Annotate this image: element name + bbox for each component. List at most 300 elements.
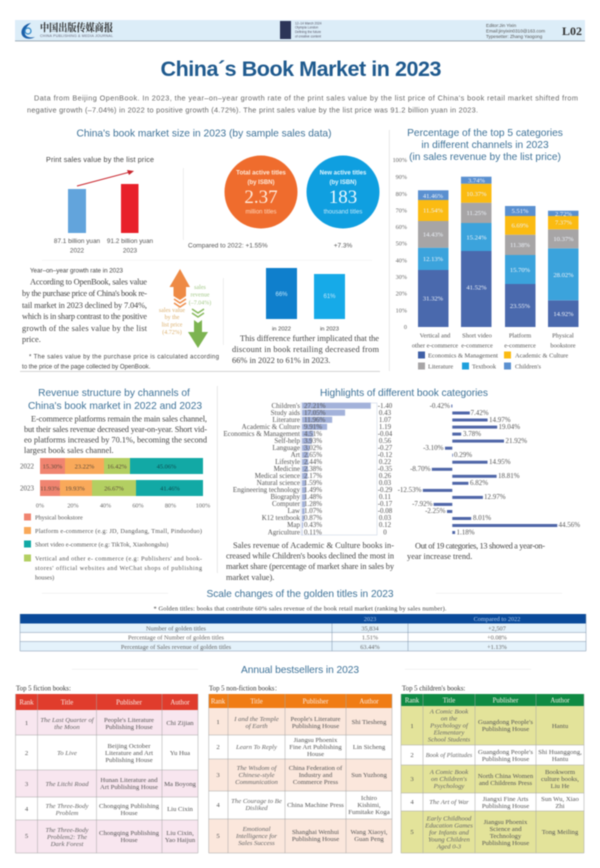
table: non-fiction: Ichiro xyxy=(361,795,378,802)
table: children's: Book of Platitudes xyxy=(426,752,473,759)
heading: China's book market in 2022 and 2023 xyxy=(28,401,202,412)
stacked bar: vertical and other: 12.13% xyxy=(423,256,444,263)
left paragraph: creased while Children's books declined the most in xyxy=(226,552,395,560)
table: non-fiction: Title xyxy=(250,698,263,706)
table: children's: 4 xyxy=(410,799,414,806)
table: fiction: Publishing House xyxy=(105,757,153,764)
market share bar chart: 0.56 xyxy=(379,437,392,445)
table: children's: Publishing House xyxy=(482,803,529,810)
table: fiction: Dark Forest xyxy=(50,841,83,848)
legend: Economics & Management xyxy=(428,352,498,360)
stacked bar: 2022: 16.42% xyxy=(107,464,128,470)
year-on-year diverging bar chart: 14.95% xyxy=(489,458,511,466)
paragraph: but their sales revenue decreased year-on-year. Short vid- xyxy=(24,425,207,434)
legend: Academic & Culture xyxy=(515,352,568,360)
table: non-fiction: 3 xyxy=(216,772,220,779)
table: fiction: The Last Quarter of xyxy=(40,717,95,724)
editor credits xyxy=(486,23,545,39)
bar chart: print sales value: 2022 xyxy=(70,248,85,254)
legend: Platform e-commerce (e.g: JD, Dangdang, Tmall, Pinduoduo) xyxy=(35,528,202,535)
stacked bar: 2023: 11.93% xyxy=(40,486,60,492)
icon: up and down arrows: (–7.04%) xyxy=(189,300,211,306)
paragraph: largest book sales channel. xyxy=(24,446,114,455)
market share bar chart: Biography xyxy=(270,493,300,501)
table: fiction: Yu Hua xyxy=(170,750,190,757)
table: fiction: Literature and Art xyxy=(105,750,153,757)
year-on-year diverging bar chart: 1.18% xyxy=(456,528,475,536)
axis labels: 60% xyxy=(132,502,144,510)
y axis labels xyxy=(393,157,407,331)
stacked bar: physical bookstore: 28.02% xyxy=(553,272,574,279)
stacked bar: 2022: 23.22% xyxy=(75,464,95,470)
table: non-fiction: The Courage to Be xyxy=(231,798,282,805)
table: children's: Guangdong People's xyxy=(478,719,533,726)
table: fiction: 4 xyxy=(25,806,29,813)
stacked bar: platform: 5.51% xyxy=(511,208,529,215)
bar chart: discount xyxy=(266,268,345,332)
table: non-fiction: Communication xyxy=(235,779,279,786)
market share bar chart: 3.93% xyxy=(304,437,322,445)
stacked bar: short video: 11.25% xyxy=(466,210,487,217)
table: fiction: People's Literature xyxy=(104,717,154,724)
stacked bar: physical bookstore: 10.37% xyxy=(553,236,574,243)
market share bar chart: Agriculture xyxy=(268,528,300,536)
year-on-year diverging bar chart: -7.92% xyxy=(412,500,433,508)
growth rate text: According to OpenBook, sales value xyxy=(30,278,147,286)
market share bar chart: Law xyxy=(288,507,301,515)
table: fiction: Beijing October xyxy=(108,743,151,750)
market share bar chart: -0.27 xyxy=(378,444,393,452)
comparison to 2022: Compared to 2022: +1.55% xyxy=(188,242,268,250)
table: non-fiction: China Federation of xyxy=(289,765,343,772)
discount text: discount in book retailing decreased from xyxy=(232,345,379,354)
paragraph xyxy=(24,414,208,455)
market share bar chart: 1.07 xyxy=(379,416,392,424)
table: non-fiction: Author xyxy=(359,698,379,706)
table: +0.08% xyxy=(487,634,508,642)
growth rate text: * The sales value by the purchase price is calculated according xyxy=(29,354,219,360)
table: fiction: Chongqing Publishing xyxy=(99,830,160,837)
legend: Textbook xyxy=(472,364,497,370)
circle: new active titles: (by ISBN) xyxy=(330,180,357,186)
stacked bar: 2023: 19.93% xyxy=(65,486,86,492)
stacked bar: 2022: 2022 xyxy=(20,462,34,470)
table: fiction: The Three-Body xyxy=(45,803,89,810)
market share bar chart: 1.19 xyxy=(379,423,392,431)
table: children's: Jiangsu Phoenix xyxy=(484,819,528,826)
table: children's: for Infants and xyxy=(429,830,470,836)
table: children's: Psychology of xyxy=(429,722,469,730)
stacked bar: vertical and other xyxy=(418,190,448,327)
table: children's: Liu He xyxy=(551,783,569,790)
newspaper name: CHINA PUBLISHING & MEDIA JOURNAL xyxy=(40,34,113,38)
circle: total active titles: 2.37 xyxy=(244,187,278,208)
stacked bar: 2022: 45.06% xyxy=(157,464,177,470)
table: children's: Title xyxy=(443,698,455,704)
market share bar chart: 0.22 xyxy=(379,458,392,466)
table: non-fiction: Shi Tiesheng xyxy=(352,719,387,726)
table: fiction xyxy=(16,686,198,853)
legend: stores' official websites and WeChat shops of publishing xyxy=(35,565,203,572)
table: children's: Elementary xyxy=(433,730,464,736)
market share bar chart: 0.26 xyxy=(379,472,392,480)
year-on-year diverging bar chart: -2.25% xyxy=(425,507,446,515)
market share bar chart: 0.11 xyxy=(379,493,391,501)
market share bar chart: Children's xyxy=(272,402,300,410)
table: children's: Sun Wu, Xiao xyxy=(541,796,579,803)
table: children's: School Students xyxy=(428,736,471,744)
table: non-fiction: 1 xyxy=(216,719,220,726)
market share bar chart: 17.05% xyxy=(304,409,326,417)
table: 1.51% xyxy=(362,634,379,642)
stacked bar: physical bookstore: 14.92% xyxy=(553,311,574,318)
icon: up and down arrows: sales xyxy=(194,285,206,291)
y axis labels: 70% xyxy=(396,208,407,214)
market share bar chart: 0.87% xyxy=(304,514,322,522)
bar chart: print sales value: Print sales value by the list price xyxy=(46,155,154,164)
footnote: * Golden titles: books that contribute 60% sales revenue of the book retail market (ranking by sales number). xyxy=(154,606,447,612)
table: children's: Zhi xyxy=(555,803,565,810)
table: fiction: Problem2: The xyxy=(46,834,87,841)
intro text: negative growth (–7.04%) in 2022 to positive growth (4.72%). The print sales value by the list price was 91.2 billion yuan in 2023. xyxy=(27,106,478,114)
comparison to 2022: +7.3% xyxy=(334,242,353,250)
market share bar chart: 1.07% xyxy=(304,507,322,515)
table: children's: Education Games xyxy=(424,822,473,830)
market share bar chart: 1.28% xyxy=(304,500,322,508)
y axis labels: 10% xyxy=(396,308,407,314)
stacked bar: physical bookstore xyxy=(548,211,578,327)
table: children's: The Art of War xyxy=(429,799,469,806)
heading: China's book market size in 2023 (by sample sales data) xyxy=(76,128,332,140)
table: children's: 3 xyxy=(410,776,414,783)
table: non-fiction: Publisher xyxy=(303,698,329,706)
market share bar chart: 2.38% xyxy=(304,465,322,473)
stacked bar: short video xyxy=(461,177,492,327)
discount text xyxy=(232,334,379,365)
table: non-fiction: China Machine Press xyxy=(287,802,344,809)
bar chart: print sales value xyxy=(46,155,154,254)
table: non-fiction: Fine Art Publishing xyxy=(289,744,342,751)
table: children's xyxy=(401,686,584,853)
page number: L02 xyxy=(562,24,582,38)
table: fiction: Publisher xyxy=(116,700,143,706)
x axis labels: e-commerce xyxy=(504,342,536,350)
market share bar chart: 9.91% xyxy=(304,423,322,431)
year-on-year diverging bar chart: 0.29% xyxy=(454,451,472,459)
circle: total active titles: (by ISBN) xyxy=(248,180,275,186)
x axis labels: Physical xyxy=(552,332,574,340)
heading: (in sales revenue by the list price) xyxy=(409,152,561,163)
legend: Physical bookstore xyxy=(35,514,83,522)
stacked bar: platform: 11.38% xyxy=(510,242,531,249)
table: fiction: House xyxy=(120,810,138,817)
legend: Short video e-commerce (e.g: TikTok, Xiaohongshu) xyxy=(35,542,168,548)
growth rate text: to the price of the page collected by OpenBook. xyxy=(22,364,151,370)
axis labels: 80% xyxy=(165,502,176,510)
stacked bar: short video: 15.24% xyxy=(466,234,487,242)
newspaper name: 中国出版传媒商报 xyxy=(40,21,113,34)
table: fiction: 2 xyxy=(25,750,28,757)
market share bar chart: Academic & Culture xyxy=(242,423,300,431)
stacked bar: 2022 xyxy=(20,458,203,474)
year-on-year diverging bar chart: 18.81% xyxy=(498,472,520,480)
market share bar chart: 0.11% xyxy=(304,528,322,536)
table: non-fiction: Commerce Press xyxy=(293,779,338,786)
stacked bar: 2023: 26.67% xyxy=(104,486,125,492)
table: non-fiction: People's Literature xyxy=(290,716,341,723)
table: non-fiction: 2 xyxy=(216,744,220,751)
table: non-fiction: The Wisdom of xyxy=(237,765,278,772)
table: children's: Publishing House xyxy=(482,726,529,733)
table: fiction: Top 5 fiction books: xyxy=(16,686,71,692)
table: children's: Psychology xyxy=(433,783,464,790)
market share bar chart: -0.12 xyxy=(378,451,393,459)
table: children's: Publishing House xyxy=(482,840,529,847)
table: non-fiction: Guan Peng xyxy=(354,836,384,843)
growth rate text: price. xyxy=(22,335,41,344)
table: fiction: Liu Cixin xyxy=(167,806,194,813)
table: 2023 xyxy=(364,616,376,623)
circle: new active titles: 183 xyxy=(329,187,357,208)
market share bar chart: -0.17 xyxy=(378,500,393,508)
year-on-year diverging bar chart: 7.42% xyxy=(470,409,489,417)
heading xyxy=(407,128,563,163)
market share bar chart: 0.03 xyxy=(379,514,392,522)
circle: total active titles: million titles xyxy=(245,210,277,216)
market share bar chart: 0.03 xyxy=(379,479,392,487)
legend: Children's xyxy=(515,364,542,370)
comparison to 2022 xyxy=(188,242,353,250)
heading: Annual bestsellers in 2023 xyxy=(241,665,359,676)
market share bar chart: 3.02% xyxy=(304,444,322,452)
heading: Percentage of the top 5 categories xyxy=(407,128,563,139)
stacked bar: short video: 10.37% xyxy=(466,191,487,198)
stacked bar: physical bookstore: 2.72% xyxy=(555,211,573,218)
legend: Vertical and other e- commerce (e.g: Publishers' and book- xyxy=(35,556,202,562)
table: children's: Shi Huanggong, xyxy=(538,749,582,756)
axis labels: 40% xyxy=(100,502,111,510)
heading: Highlights of different book categories xyxy=(320,388,488,399)
market share bar chart: Map xyxy=(287,521,300,529)
year-on-year diverging bar chart: 8.01% xyxy=(473,514,491,522)
axis labels: 0% xyxy=(36,502,44,510)
legend xyxy=(24,514,203,582)
stacked bar: vertical and other: 14.43% xyxy=(423,232,444,238)
book fair notice: Olympia London xyxy=(295,26,318,30)
table: Compared to 2022 xyxy=(474,616,520,623)
legend xyxy=(418,352,568,370)
circle: new active titles xyxy=(306,156,380,228)
stacked bar: 2023: 2023 xyxy=(20,484,34,492)
table: children's: A Comic Book xyxy=(429,769,469,776)
bar chart: discount: 66% xyxy=(275,292,288,298)
table: children's: 5 xyxy=(410,829,414,836)
legend: Literature xyxy=(428,364,453,370)
icon: up and down arrows: list price xyxy=(162,322,183,328)
bar chart: print sales value: 2023 xyxy=(123,248,138,254)
table: children's: on the xyxy=(441,716,457,722)
growth rate text: tail market in 2023 declined by 7.04%, xyxy=(22,301,147,310)
table: fiction: Art Publishing House xyxy=(100,784,158,791)
stacked bar: vertical and other: 31.32% xyxy=(423,296,444,302)
discount text: 66% in 2022 to 61% in 2023. xyxy=(232,356,330,365)
editor credits: Editor:Jin Yixin xyxy=(486,23,517,28)
year-on-year diverging bar chart: 12.97% xyxy=(484,493,506,501)
market share bar chart: Engineering technology xyxy=(233,486,300,494)
table: Number of golden titles xyxy=(146,626,207,632)
market share bar chart: Art xyxy=(291,451,300,459)
y axis labels: 50% xyxy=(396,240,407,248)
market share bar chart: Literature xyxy=(272,416,300,424)
table: children's: Rank xyxy=(405,698,420,704)
table: non-fiction: Sales Success xyxy=(238,840,275,847)
table: fiction: The Litchi Road xyxy=(45,781,89,788)
table: non-fiction: Lin Sicheng xyxy=(353,744,386,751)
market share bar chart: 2.17% xyxy=(304,472,322,480)
axis labels xyxy=(36,502,210,510)
stacked bar: 2023: 41.46% xyxy=(160,486,181,492)
book fair notice xyxy=(280,21,322,39)
table: children's: Jiangxi Fine Arts xyxy=(483,796,529,803)
table: children's: A Comic Book xyxy=(429,708,469,716)
year-on-year diverging bar chart: 21.92% xyxy=(506,437,527,445)
y axis labels: 60% xyxy=(396,224,407,231)
year-on-year diverging bar chart: -0.42% xyxy=(430,402,450,410)
axis labels: 100% xyxy=(196,502,210,510)
year-on-year diverging bar chart: 6.82% xyxy=(470,479,488,487)
editor credits: Email:jinyixin0310@163.com xyxy=(486,28,545,34)
x axis labels: e-commerce xyxy=(461,342,493,350)
table: children's: on Children's xyxy=(431,776,467,783)
panel: annual bestsellers xyxy=(16,665,584,853)
stacked bar: platform: 23.55% xyxy=(510,303,531,310)
table: children's: 2 xyxy=(410,752,414,759)
table: non-fiction: Jiangsu Phoenix xyxy=(294,737,338,744)
book fair notice: 12–14 March 2024 xyxy=(295,22,322,26)
table: non-fiction: Top 5 non-fiction books： xyxy=(209,686,281,692)
table: non-fiction: Sun Yuzhong xyxy=(351,772,387,779)
icon: up and down arrows: by the xyxy=(165,315,180,321)
table: fiction: Hunan Literature and xyxy=(100,777,158,784)
table: children's: Tong Meiling xyxy=(542,829,579,836)
table: children's: Science and xyxy=(489,826,522,833)
table: non-fiction: Rank xyxy=(211,698,226,706)
market share bar chart: Economics & Management xyxy=(223,430,300,438)
table: non-fiction: Shanghai Wenhui xyxy=(292,829,339,836)
x axis labels: bookstore xyxy=(550,342,576,350)
market share bar chart: Natural science xyxy=(257,479,300,487)
table: +2,507 xyxy=(488,626,506,632)
heading xyxy=(28,388,202,412)
y axis labels: 20% xyxy=(396,290,407,298)
table: children's: Author xyxy=(550,698,570,704)
market share bar chart: 1.49% xyxy=(304,486,322,494)
icon: up and down arrows: (4.72%) xyxy=(162,329,182,336)
market share bar chart: Lifestyle xyxy=(275,458,300,466)
x axis labels: Platform xyxy=(509,332,531,340)
year-on-year diverging bar chart: 14.97% xyxy=(489,416,511,424)
axis labels: 20% xyxy=(67,502,79,510)
table: non-fiction: of Earth xyxy=(245,723,268,730)
table: non-fiction: 5 xyxy=(216,833,220,840)
table: non-fiction: Learn To Reply xyxy=(235,744,277,751)
year-on-year diverging bar chart: 44.56% xyxy=(558,521,580,529)
panel: market size xyxy=(20,128,380,372)
heading: Scale changes of the golden titles in 2023 xyxy=(206,589,394,600)
table: non-fiction: Industry and xyxy=(299,772,333,779)
table: fiction: 3 xyxy=(25,781,29,788)
x axis labels xyxy=(412,332,576,350)
editor credits: Typesetter: Zhang Yaogong xyxy=(486,34,543,39)
table: +1.13% xyxy=(487,644,508,651)
discount text: This difference further implicated that the xyxy=(240,334,379,343)
icon: up and down arrows xyxy=(159,269,211,348)
table: fiction: The Three-Body xyxy=(45,827,89,834)
table: non-fiction: Chinese-style xyxy=(238,772,275,779)
stacked bar: platform xyxy=(505,206,536,327)
table: non-fiction: 4 xyxy=(216,802,220,809)
table: non-fiction: Fumitake Koga xyxy=(348,809,390,816)
table: children's: Publisher xyxy=(493,698,519,704)
table: non-fiction: Intelligence for xyxy=(235,833,277,840)
market share bar chart: -1.40 xyxy=(378,402,393,410)
stacked bar: platform: 15.70% xyxy=(510,267,531,274)
table: non-fiction: Publishing House xyxy=(292,723,339,730)
market share bar chart: -0.35 xyxy=(378,465,393,473)
table: non-fiction: Kishimi, xyxy=(357,802,381,809)
table: children's: Hantu xyxy=(552,756,569,763)
market share bar chart: -0.04 xyxy=(378,430,393,438)
bar chart: print sales value: 87.1 billion yuan xyxy=(54,238,101,245)
table: fiction: To Live xyxy=(57,750,77,757)
y axis labels: 80% xyxy=(396,191,407,198)
stacked bar: 2022: 15.30% xyxy=(43,464,63,470)
table: Percentage of Number of golden titles xyxy=(128,634,225,642)
market share bar chart: 0.12 xyxy=(379,521,392,529)
market share bar chart: 0 xyxy=(383,528,387,536)
table: children's: Hantu xyxy=(552,723,569,730)
market share bar chart: Medicine xyxy=(274,465,300,473)
year-on-year diverging bar chart xyxy=(398,402,580,536)
growth rate text: which is in sharp contrast to the positive xyxy=(22,312,147,321)
table: children's: Guangdong People's xyxy=(478,749,533,756)
table: children's: 1 xyxy=(410,723,414,730)
stacked bar: platform: 6.69% xyxy=(511,222,529,230)
table: fiction: 1 xyxy=(25,720,28,727)
x axis labels: Vertical and xyxy=(420,332,451,340)
table xyxy=(20,614,586,651)
panel: top 5 categories xyxy=(393,128,578,370)
circle: new active titles: New active titles xyxy=(320,170,367,176)
stacked bar: 2023 xyxy=(20,480,203,496)
market share bar chart xyxy=(223,402,393,536)
table: children's: North China Women xyxy=(478,773,534,780)
table: 63.44% xyxy=(360,644,380,651)
growth rate text: by the purchase price of China's book re- xyxy=(22,289,147,298)
table: fiction: Chi Zijian xyxy=(166,720,194,727)
bar chart: discount: 61% xyxy=(323,294,336,300)
market share bar chart: 11.96% xyxy=(304,416,325,424)
book fair notice: Defining the future xyxy=(295,30,321,34)
table: children's: Aged 0-3 xyxy=(436,844,462,850)
market share bar chart: 1.48% xyxy=(304,493,322,501)
table: fiction: Title xyxy=(61,700,73,706)
table: children's: Young Children xyxy=(428,836,470,844)
stacked bar: vertical and other: 11.54% xyxy=(423,208,444,214)
market share bar chart: 0.43% xyxy=(304,521,322,529)
table: non-fiction: Emotional xyxy=(242,826,271,833)
market share bar chart: -0.29 xyxy=(378,486,393,494)
